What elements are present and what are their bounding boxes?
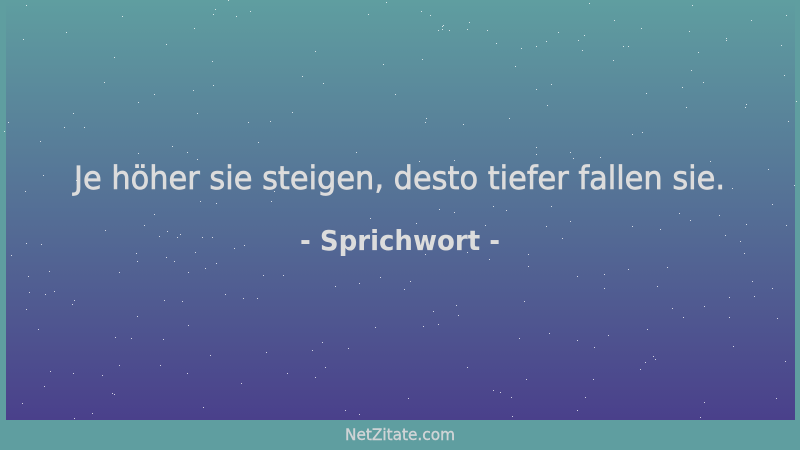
attribution: - Sprichwort - xyxy=(300,224,500,257)
footer site name: NetZitate.com xyxy=(345,425,455,444)
quote text: Je höher sie steigen, desto tiefer fallen sie. xyxy=(72,159,725,197)
